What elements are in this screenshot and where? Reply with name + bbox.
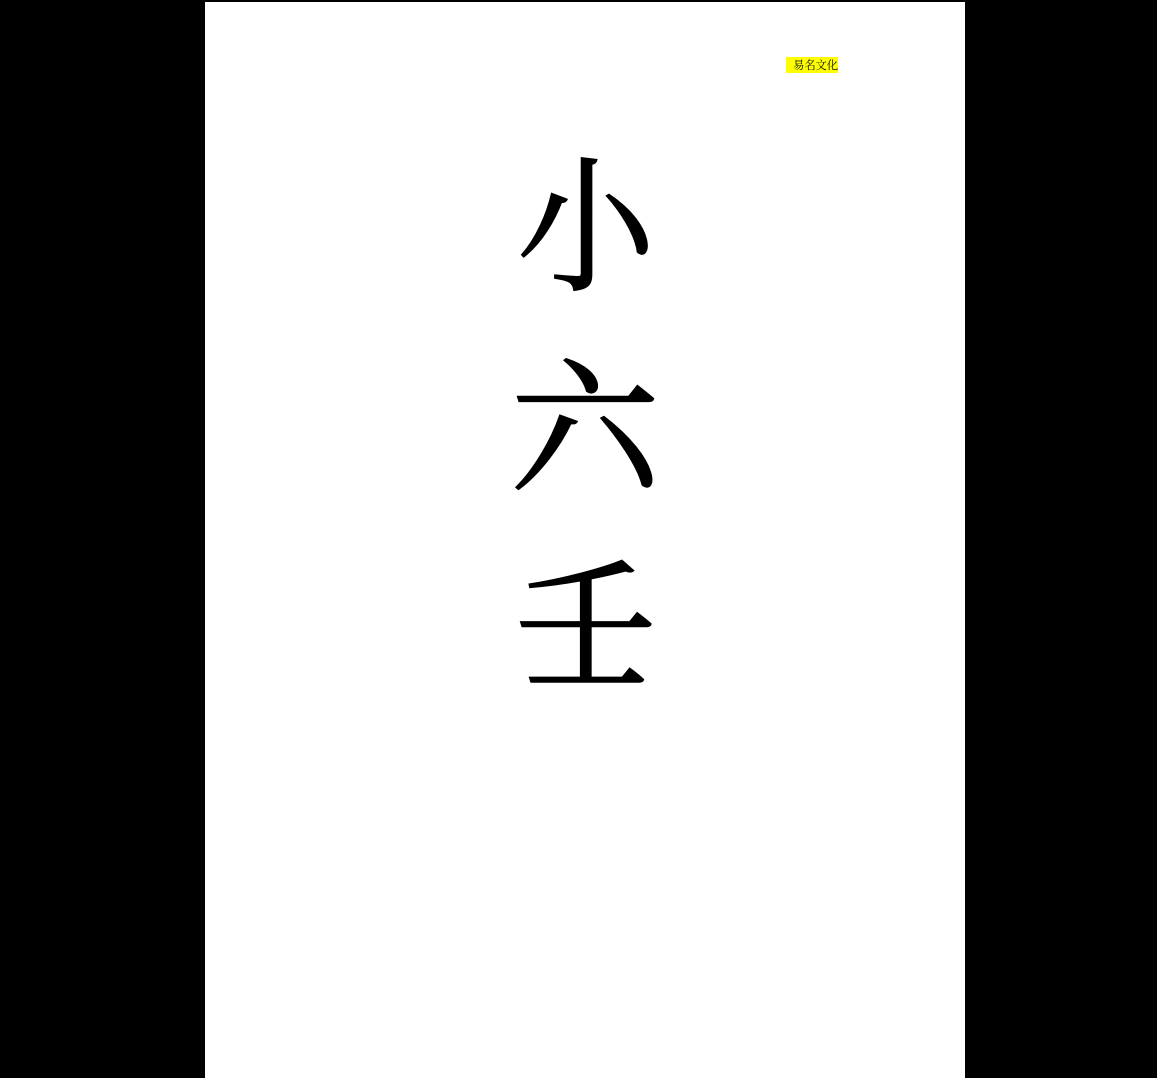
title character: small: 小 bbox=[517, 149, 655, 311]
title character: ren: 壬 bbox=[516, 552, 656, 708]
white document page bbox=[205, 2, 965, 1078]
title character: six: 六 bbox=[510, 351, 660, 513]
yellow highlighted label: 易名文化 bbox=[793, 60, 838, 72]
vertical title bbox=[510, 149, 660, 708]
yellow highlighted label bbox=[786, 57, 838, 73]
